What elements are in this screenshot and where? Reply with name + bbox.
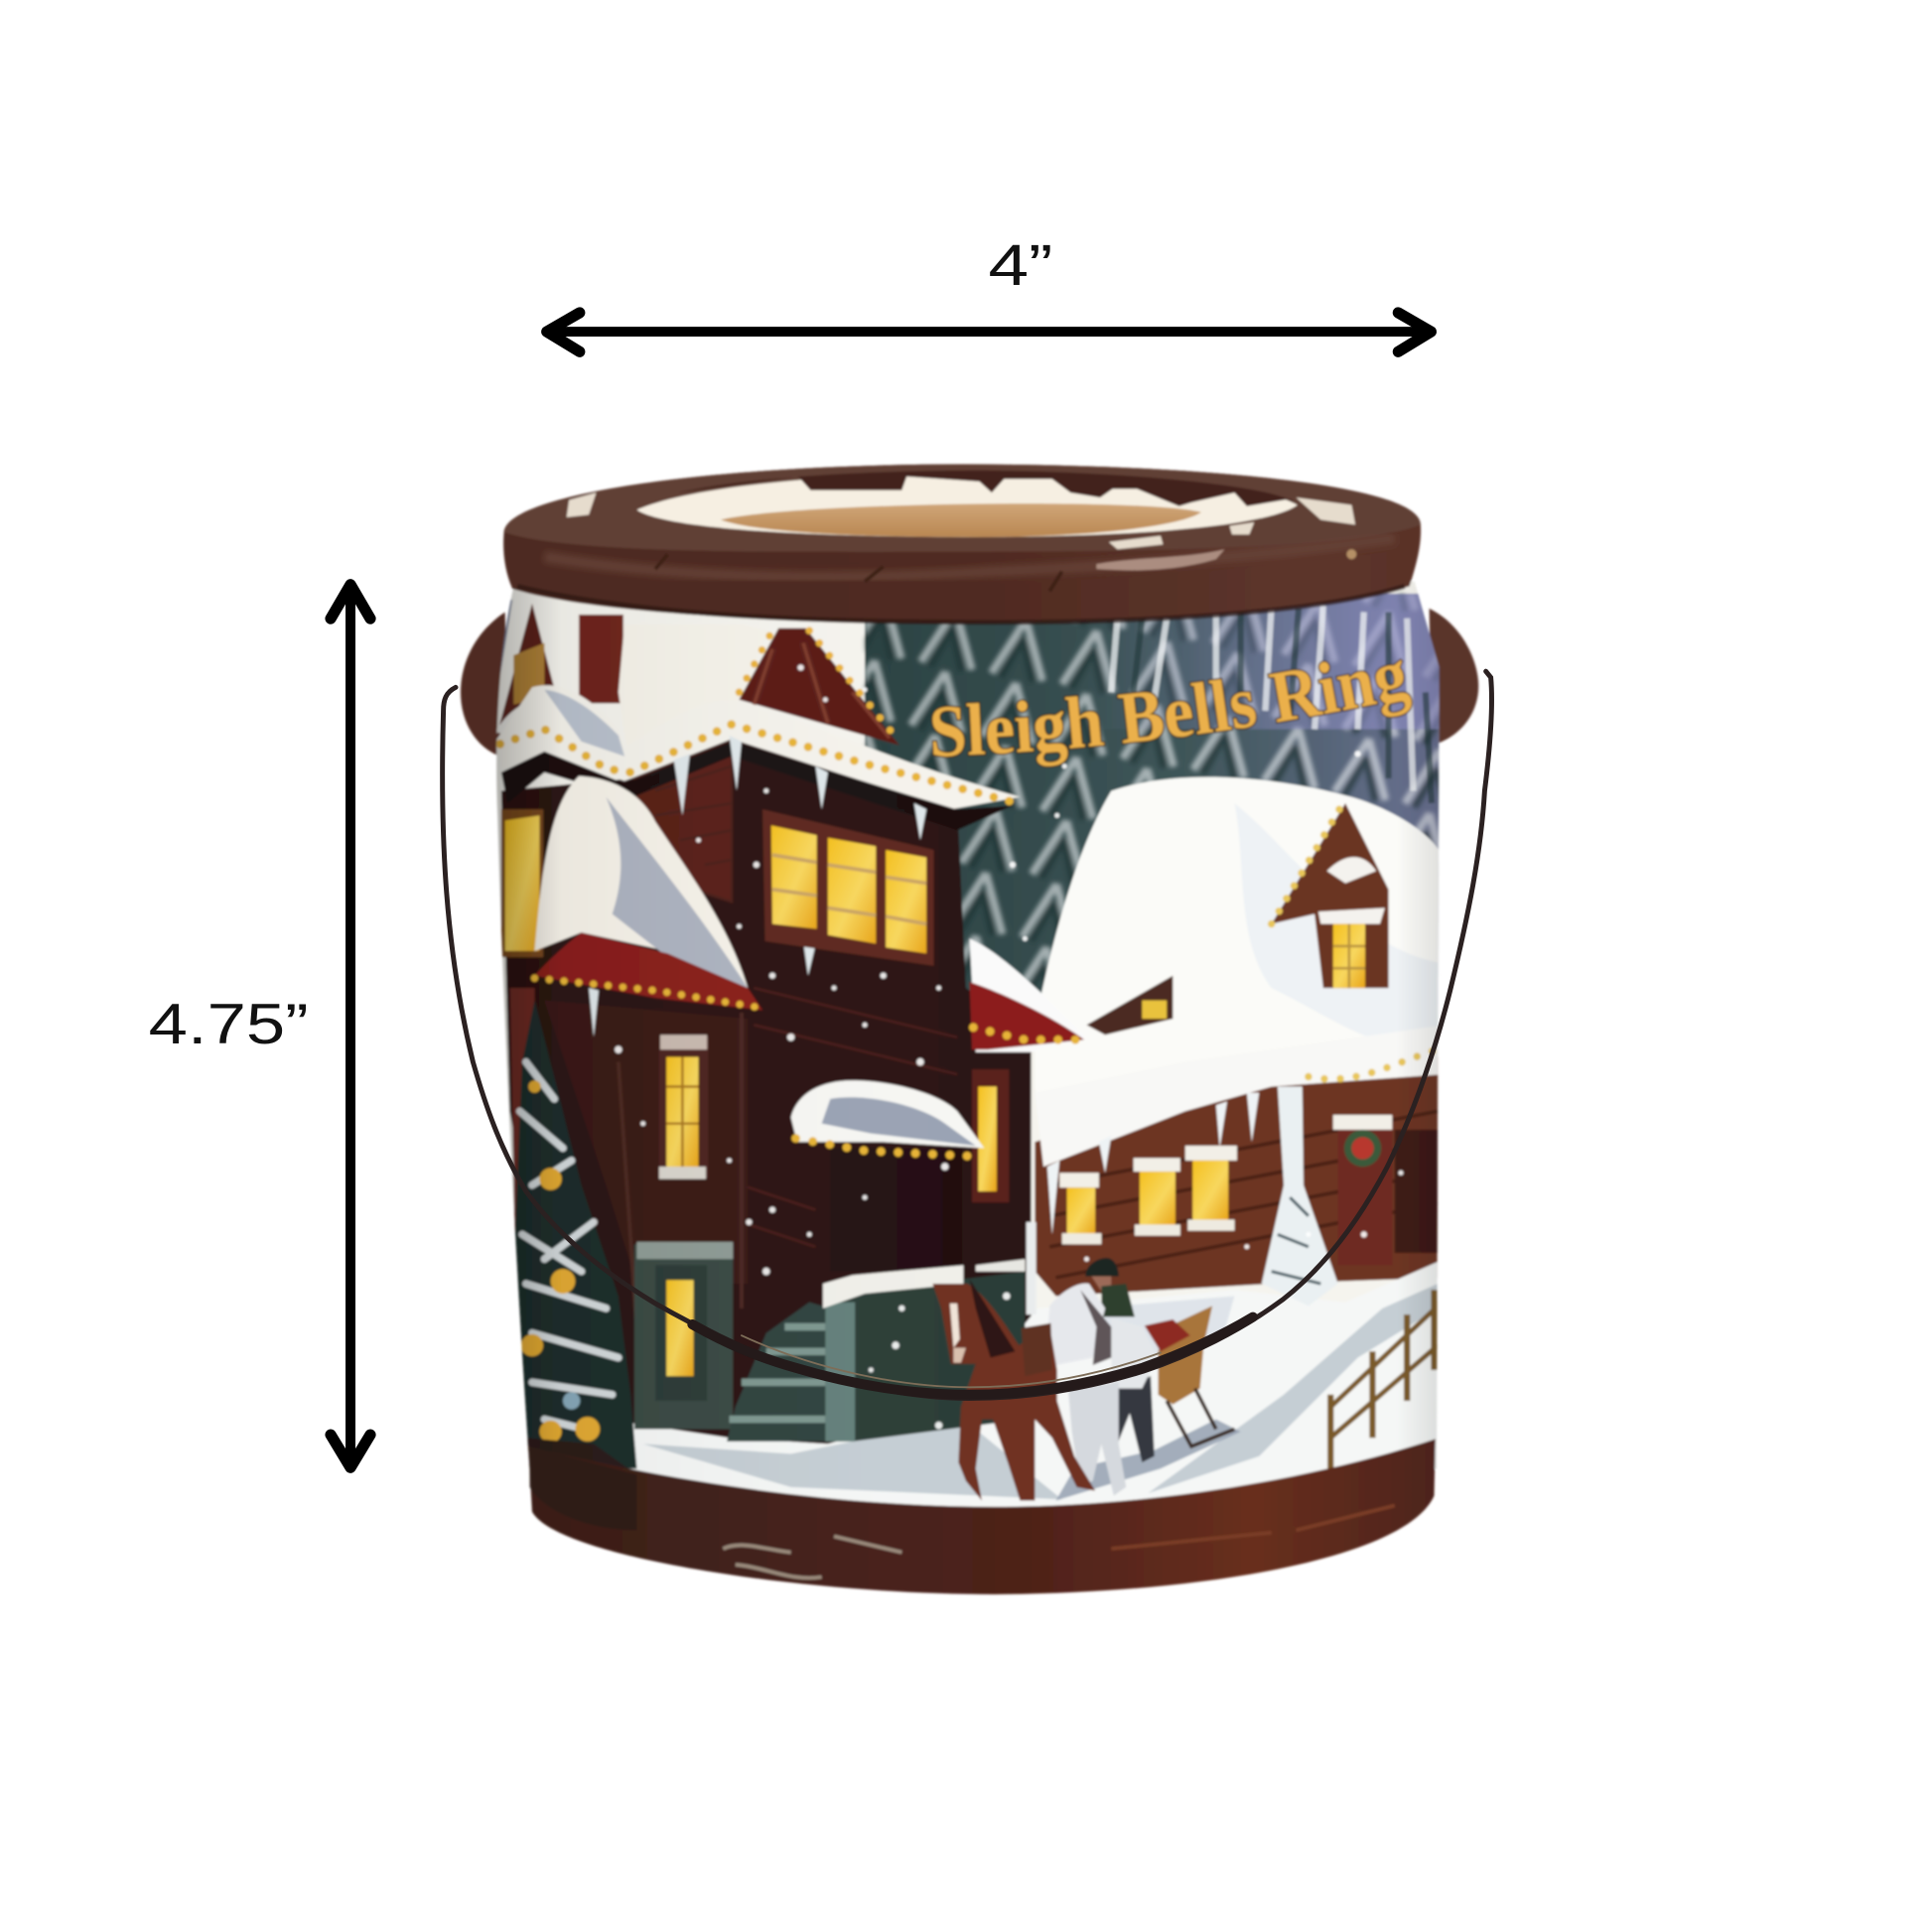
lean-to snow roof — [534, 776, 748, 988]
brown horse — [932, 1279, 1095, 1500]
top rim — [503, 465, 1421, 623]
height arrow — [331, 585, 370, 1467]
width arrow — [547, 313, 1431, 351]
door with wreath — [1333, 1115, 1439, 1265]
back snow roof — [616, 637, 625, 705]
chimney — [579, 615, 623, 703]
product dimension infographic — [150, 244, 1494, 1596]
left small gable — [494, 599, 555, 739]
candle tin — [440, 463, 1494, 1596]
winter pine forest background — [865, 594, 1456, 1001]
driver on sleigh — [1085, 1258, 1135, 1317]
left handle lug — [461, 613, 507, 757]
sleigh tracks shadow — [1055, 1420, 1241, 1500]
gable with lights — [739, 628, 899, 746]
lower house windows — [1059, 1146, 1237, 1244]
cylinder shading — [495, 582, 1444, 1518]
rim opening — [636, 471, 1298, 537]
label title: Sleigh Bells Ring — [930, 657, 1414, 768]
main house wall — [501, 732, 1032, 1444]
lighter wood siding — [634, 742, 957, 1247]
painted label scene — [489, 582, 1456, 1518]
eave shadow — [501, 742, 1013, 830]
height label: 4.75” — [149, 993, 309, 1056]
green doorway block — [634, 1242, 733, 1430]
left upstairs window — [501, 809, 543, 957]
lower house wood wall — [1035, 1055, 1444, 1296]
right handle lug — [1430, 609, 1478, 746]
small red side roof — [970, 939, 1087, 1052]
wire handle — [443, 671, 1492, 1398]
red sleigh — [1145, 1306, 1234, 1447]
porch roof — [791, 1080, 984, 1157]
bottom brown band — [528, 1439, 1436, 1594]
door under porch — [848, 1148, 963, 1269]
width label: 4” — [988, 233, 1052, 298]
fir tree with ornaments — [515, 1001, 636, 1468]
main roof lights — [500, 725, 1018, 803]
fence — [1330, 1290, 1438, 1468]
dark lower-left shadow — [526, 1438, 636, 1474]
green garden wall — [823, 1222, 1036, 1442]
falling snow — [615, 664, 1403, 1430]
large snow roof right — [1036, 774, 1440, 1090]
snowy stair steps — [727, 1303, 830, 1442]
icicles — [589, 736, 926, 1037]
lower left window — [659, 1035, 708, 1179]
large upstairs window — [762, 809, 934, 966]
main roof snow — [495, 685, 1020, 809]
lower roof snow edge — [1035, 1025, 1444, 1234]
side window — [972, 1069, 1009, 1202]
snowy column and fir — [1262, 1086, 1338, 1306]
red lower roof — [534, 932, 762, 1010]
dormer — [1272, 803, 1389, 988]
courtyard snow ground — [594, 1259, 1444, 1518]
white horse — [1047, 1284, 1157, 1496]
